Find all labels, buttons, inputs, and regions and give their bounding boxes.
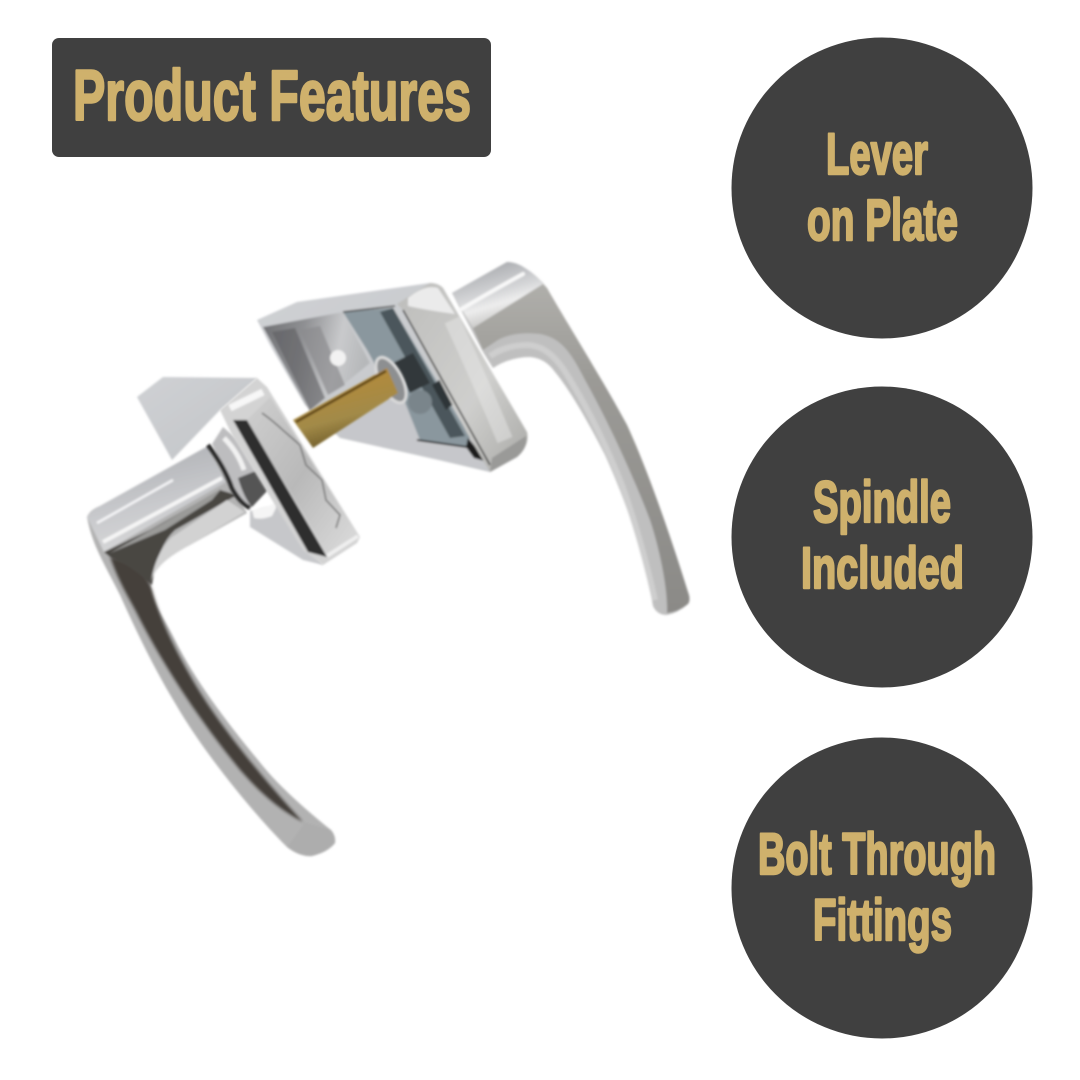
left rose front face [220,378,360,565]
right rose plate [257,283,528,472]
title text: Product Features [73,57,471,136]
label: spindle included: Spindle [813,470,951,535]
label: lever on plate [807,122,958,253]
left lever handle [87,446,335,856]
label: spindle included: Included [801,536,964,601]
label: lever on plate: on Plate [807,188,958,253]
label: spindle included [801,470,964,601]
spindle [293,353,412,448]
left rose back plate [137,377,323,565]
inner mounting plate [343,308,470,447]
product photo: lever handle pair [87,262,690,856]
label: bolt through fittings: Fittings [813,888,952,953]
left collar [208,427,268,510]
title banner [52,38,491,157]
rose face band [397,283,528,472]
right lever handle [452,262,690,615]
feature circle: bolt through fittings [732,738,1032,1038]
dark chrome core [110,557,303,822]
cylinder [87,446,226,552]
feature circle: lever on plate [732,38,1032,338]
label: lever on plate: Lever [826,122,928,187]
feature circle: spindle included [732,386,1032,688]
label: bolt through fittings [758,822,996,953]
